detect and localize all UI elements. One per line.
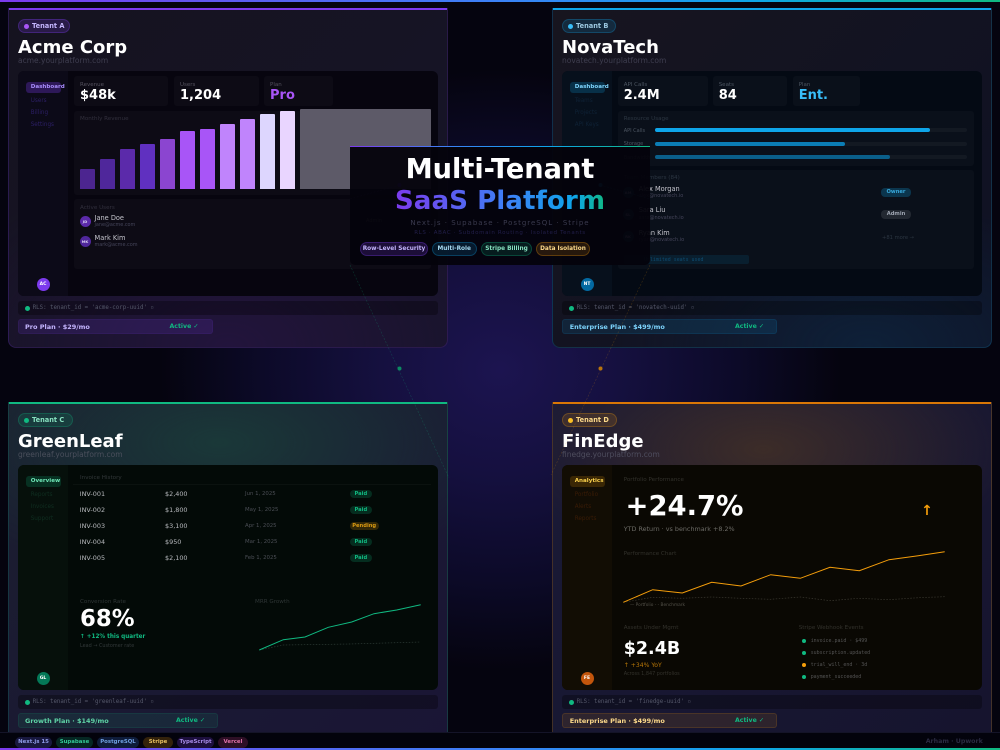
member: Sara Liu: sara@novatech.io <box>639 215 684 221</box>
title line one: Multi-Tenant <box>406 154 594 184</box>
plan bar <box>562 319 777 334</box>
RLS bar: RLS: tenant_id = 'novatech-uuid' ▫ <box>577 305 694 311</box>
connector: FinEdge <box>551 265 650 475</box>
row INV-001: INV-001 <box>80 490 105 498</box>
pill: row-level security: Row-Level Security <box>363 246 425 252</box>
tenant badge <box>18 413 73 427</box>
role: admin <box>881 210 911 218</box>
stat: api calls: API Calls <box>624 82 647 88</box>
row INV-001 <box>80 490 372 498</box>
plan bar: Active ✓ <box>176 716 205 724</box>
stat: users <box>174 76 258 106</box>
row INV-004: $950 <box>165 538 181 546</box>
MRR label: MRR Growth <box>255 599 290 605</box>
tenant avatar <box>580 278 594 290</box>
accent line <box>552 8 992 10</box>
member: Ryan Kim: Ryan Kim <box>639 229 670 237</box>
active nav item: Analytics <box>575 478 604 484</box>
tenant avatar <box>36 672 50 684</box>
user: Mark Kim: MK <box>82 238 88 244</box>
stat: plan: Plan <box>270 82 282 88</box>
stat: users: Users <box>180 82 195 88</box>
chart label: Monthly Revenue <box>80 116 129 122</box>
stat: seats: 84 <box>719 88 737 103</box>
member: Ryan Kim: RK <box>625 234 631 239</box>
tenant avatar: FE <box>584 676 590 680</box>
AUM label: Assets Under Mgmt <box>624 625 678 631</box>
member: Sara Liu: Sara Liu <box>639 206 665 214</box>
row INV-002: May 1, 2025 <box>245 507 278 513</box>
usage: bandwidth: Bandwidth <box>624 154 650 160</box>
tenant badge: Tenant B <box>576 22 608 30</box>
user: Mark Kim: Mark Kim <box>94 234 125 242</box>
seats note <box>624 255 748 264</box>
plan bar: Growth Plan · $149/mo <box>25 716 109 724</box>
RLS bar <box>562 301 982 315</box>
line chart: MRR growth <box>259 604 421 650</box>
nav: support: Support <box>31 516 53 522</box>
plan bar <box>562 713 777 728</box>
RLS bar: RLS: tenant_id = 'finedge-uuid' ▫ <box>577 699 691 705</box>
tenant domain: greenleaf.yourplatform.com <box>18 450 123 459</box>
AUM delta: ↑ +34% YoY <box>624 662 662 669</box>
invoice table <box>80 475 379 562</box>
tenant name: Acme Corp <box>18 36 127 58</box>
user: Mark Kim <box>80 234 138 248</box>
seats note: Unlimited seats used <box>644 256 703 262</box>
active users label: Active Users <box>80 204 115 210</box>
AUM value: $2.4B <box>624 639 680 659</box>
table rule <box>73 484 431 485</box>
dashboard mockup <box>562 71 982 296</box>
user: Jane Doe: Jane Doe <box>94 214 124 222</box>
row INV-005: Paid <box>354 555 367 561</box>
chip: Supabase <box>56 737 93 748</box>
dashboard mockup <box>562 465 982 690</box>
gradient accent line <box>350 146 650 147</box>
stat: plan: Plan <box>799 82 810 88</box>
chip: PostgreSQL <box>97 737 139 748</box>
row INV-004 <box>80 538 372 546</box>
chip: TypeScript: TypeScript <box>179 739 212 745</box>
usage: bandwidth <box>624 154 966 160</box>
row INV-002 <box>80 506 372 514</box>
active users card <box>74 199 431 269</box>
usage: api calls <box>624 128 966 134</box>
event: trial_will_end: trial_will_end · 3d <box>811 662 867 668</box>
plan bar: Active ✓ <box>735 716 764 724</box>
pill: data isolation <box>536 242 590 256</box>
accent line <box>8 402 448 404</box>
line chart: performance <box>623 551 945 603</box>
tenant badge <box>562 19 616 33</box>
plan bar <box>18 713 218 728</box>
active nav item: Dashboard <box>575 84 609 90</box>
YTD note: YTD Return · vs benchmark +8.2% <box>624 525 735 533</box>
RLS bar <box>18 695 438 709</box>
panel: Tenant D FinEdge <box>552 402 992 742</box>
user: Mark Kim: mark@acme.com <box>94 242 137 248</box>
accent line <box>8 8 448 10</box>
row INV-004: INV-004 <box>80 538 105 546</box>
user: Jane Doe: jane@acme.com <box>94 222 135 228</box>
nav: api keys: API Keys <box>575 122 599 128</box>
pill: row-level security <box>360 242 428 256</box>
RLS bar <box>562 695 982 709</box>
tenant avatar: AC <box>40 282 46 286</box>
row INV-004: Mar 1, 2025 <box>245 539 277 545</box>
chip: Supabase: Supabase <box>60 739 89 745</box>
chart legend: — Portfolio - - Benchmark <box>630 603 685 608</box>
stat: revenue: $48k <box>80 88 116 103</box>
chip: Stripe <box>143 737 173 748</box>
tenant badge: Tenant D <box>576 416 609 424</box>
tenant avatar: NT <box>584 282 590 286</box>
stat: seats: Seats <box>719 82 734 88</box>
nav: billing: Billing <box>31 110 48 116</box>
plan bar: Enterprise Plan · $499/mo <box>570 716 665 724</box>
footer credit: Arham · Upwork <box>926 738 983 745</box>
member: Alex Morgan <box>625 185 683 199</box>
active nav item <box>26 476 61 486</box>
row INV-003: INV-003 <box>80 522 105 530</box>
nav: reports: Reports <box>31 492 53 498</box>
stat: revenue: Revenue <box>80 82 104 88</box>
tenant badge: Tenant C <box>32 416 64 424</box>
event: subscription.updated: subscription.updated <box>811 650 870 656</box>
pill: multi-role: Multi-Role <box>438 246 471 252</box>
conversion label: Conversion Rate <box>80 599 126 605</box>
member: Sara Liu <box>625 206 684 221</box>
usage: storage <box>624 141 966 147</box>
member: Alex Morgan: Alex Morgan <box>639 185 680 193</box>
chip: Next.js: Next.js 15 <box>18 739 49 745</box>
chip: TypeScript <box>177 737 214 748</box>
RLS bar: RLS: tenant_id = 'greenleaf-uuid' ▫ <box>33 699 154 705</box>
stat: plan: Pro <box>270 88 295 103</box>
tenant avatar <box>580 672 594 684</box>
row INV-005: Feb 1, 2025 <box>245 555 277 561</box>
nav: invoices: Invoices <box>31 504 54 510</box>
row INV-001: Paid <box>354 491 367 497</box>
RLS bar <box>18 301 438 315</box>
chart label: Performance Chart <box>624 551 676 557</box>
chip: Vercel <box>218 737 248 748</box>
row INV-004: Paid <box>354 539 367 545</box>
chip: Stripe: Stripe <box>149 739 167 745</box>
stat: plan: Ent. <box>799 88 828 103</box>
tenant avatar: GL <box>40 676 46 680</box>
panel: Tenant C GreenLeaf <box>8 402 448 742</box>
member: Alex Morgan: AM <box>625 190 631 195</box>
chip: PostgreSQL: PostgreSQL <box>100 739 136 745</box>
row INV-002: INV-002 <box>80 506 105 514</box>
dashboard mockup <box>18 71 438 296</box>
chip: Next.js <box>15 737 52 748</box>
row INV-003: Apr 1, 2025 <box>245 523 277 529</box>
conversion note: Lead → Customer rate <box>80 643 134 649</box>
tenant avatar <box>36 278 50 290</box>
stat: plan <box>793 76 860 106</box>
title line two: SaaS Platform <box>395 186 605 216</box>
role: admin: Admin <box>887 211 905 217</box>
table heading: Invoice History <box>80 475 122 481</box>
row INV-002: Paid <box>354 507 367 513</box>
pill: multi-role <box>432 242 476 256</box>
team members label: Team Members (84) <box>624 175 680 181</box>
active nav item <box>26 82 61 92</box>
role: owner: Owner <box>886 189 905 195</box>
nav: portfolio: Portfolio <box>575 492 598 498</box>
user: Jane Doe: JD <box>83 218 87 224</box>
footer bar <box>0 732 1000 748</box>
tenant name: FinEdge <box>562 430 644 452</box>
row INV-003 <box>80 522 379 530</box>
tenant domain: acme.yourplatform.com <box>18 56 108 65</box>
dashboard mockup <box>18 465 438 690</box>
member: Sara Liu: SL <box>625 212 631 217</box>
pill: stripe billing: Stripe Billing <box>485 246 528 252</box>
row INV-001: Jun 1, 2025 <box>245 491 276 497</box>
resource usage label: Resource Usage <box>624 116 669 122</box>
conversion delta: ↑ +12% this quarter <box>80 634 145 640</box>
active nav item: Dashboard <box>31 84 65 90</box>
nav: alerts: Alerts <box>575 504 591 510</box>
member: Alex Morgan: alex@novatech.io <box>639 193 683 199</box>
event: payment_succeeded: payment_succeeded <box>811 674 861 680</box>
center title card <box>350 146 650 265</box>
row INV-003: $3,100 <box>165 522 188 530</box>
active nav item <box>570 476 605 486</box>
tenant name: GreenLeaf <box>18 430 123 452</box>
user: Jane Doe <box>80 214 135 228</box>
plan bar: Enterprise Plan · $499/mo <box>570 323 665 331</box>
accent line <box>552 402 992 404</box>
stat: api calls <box>618 76 708 106</box>
member: Ryan Kim <box>625 229 684 243</box>
portfolio value: +24.7% <box>626 491 743 522</box>
stat: users: 1,204 <box>180 88 221 103</box>
bottom gradient bar <box>0 748 1000 750</box>
nav: users: Users <box>31 98 47 104</box>
more members link: +81 more → <box>882 235 914 241</box>
portfolio label: Portfolio Performance <box>624 477 684 483</box>
panel: Tenant B NovaTech <box>552 8 992 348</box>
role label: Admin <box>366 218 382 224</box>
role: owner <box>881 188 911 196</box>
plan bar: Active ✓ <box>170 323 199 330</box>
tenant domain: novatech.yourplatform.com <box>562 56 666 65</box>
connector: Acme <box>350 183 402 199</box>
usage: storage: Storage <box>624 141 643 147</box>
row INV-001: $2,400 <box>165 490 188 498</box>
pill: stripe billing <box>481 242 532 256</box>
nav: projects: Projects <box>575 110 597 116</box>
sidebar <box>562 71 612 296</box>
bar chart <box>80 109 431 189</box>
AUM note: Across 1,847 portfolios <box>624 671 680 677</box>
plan bar <box>18 319 213 334</box>
tenant badge: Tenant A <box>32 22 64 30</box>
tenant name: NovaTech <box>562 36 659 58</box>
plan bar: Pro Plan · $29/mo <box>25 323 90 331</box>
row INV-003: Pending <box>352 523 376 529</box>
stat: revenue <box>74 76 168 106</box>
event: invoice.paid: invoice.paid · $499 <box>811 638 867 644</box>
chip: Vercel: Vercel <box>224 739 242 745</box>
active nav item: Overview <box>31 478 60 484</box>
member: Ryan Kim: ryan@novatech.io <box>639 237 684 243</box>
sidebar <box>18 465 68 690</box>
usage: api calls: API Calls <box>624 128 645 134</box>
RLS bar: RLS: tenant_id = 'acme-corp-uuid' ▫ <box>33 305 154 311</box>
panel: Tenant A Acme Corp <box>8 8 448 348</box>
stat: seats <box>713 76 787 106</box>
nav: reports: Reports <box>575 516 597 522</box>
connector: NovaTech <box>598 183 650 199</box>
tenant domain: finedge.yourplatform.com <box>562 450 660 459</box>
sidebar <box>18 71 68 296</box>
tenant badge <box>18 19 70 33</box>
sidebar <box>562 465 612 690</box>
pill: data isolation: Data Isolation <box>540 246 586 252</box>
team members card <box>618 170 974 269</box>
plan bar: Active ✓ <box>735 323 764 330</box>
resource usage card <box>618 110 974 166</box>
connector: GreenLeaf <box>350 265 449 478</box>
webhook label: Stripe Webhook Events <box>799 625 864 631</box>
active nav item <box>570 82 605 92</box>
top gradient bar <box>0 0 1000 2</box>
row INV-002: $1,800 <box>165 506 188 514</box>
row INV-005: INV-005 <box>80 554 105 562</box>
features subtitle: RLS · ABAC · Subdomain Routing · Isolated Tenants <box>414 230 586 236</box>
tenant badge <box>562 413 617 427</box>
conversion value: 68% <box>80 606 135 632</box>
up arrow icon: ↑ <box>921 503 933 519</box>
row INV-005 <box>80 554 372 562</box>
nav: settings: Settings <box>31 122 54 128</box>
row INV-005: $2,100 <box>165 554 188 562</box>
stat: api calls: 2.4M <box>624 88 660 103</box>
stat: plan <box>264 76 333 106</box>
nav: teams: Teams <box>575 98 593 104</box>
monthly revenue chart card <box>74 110 431 194</box>
tech stack subtitle: Next.js · Supabase · PostgreSQL · Stripe <box>410 219 590 227</box>
